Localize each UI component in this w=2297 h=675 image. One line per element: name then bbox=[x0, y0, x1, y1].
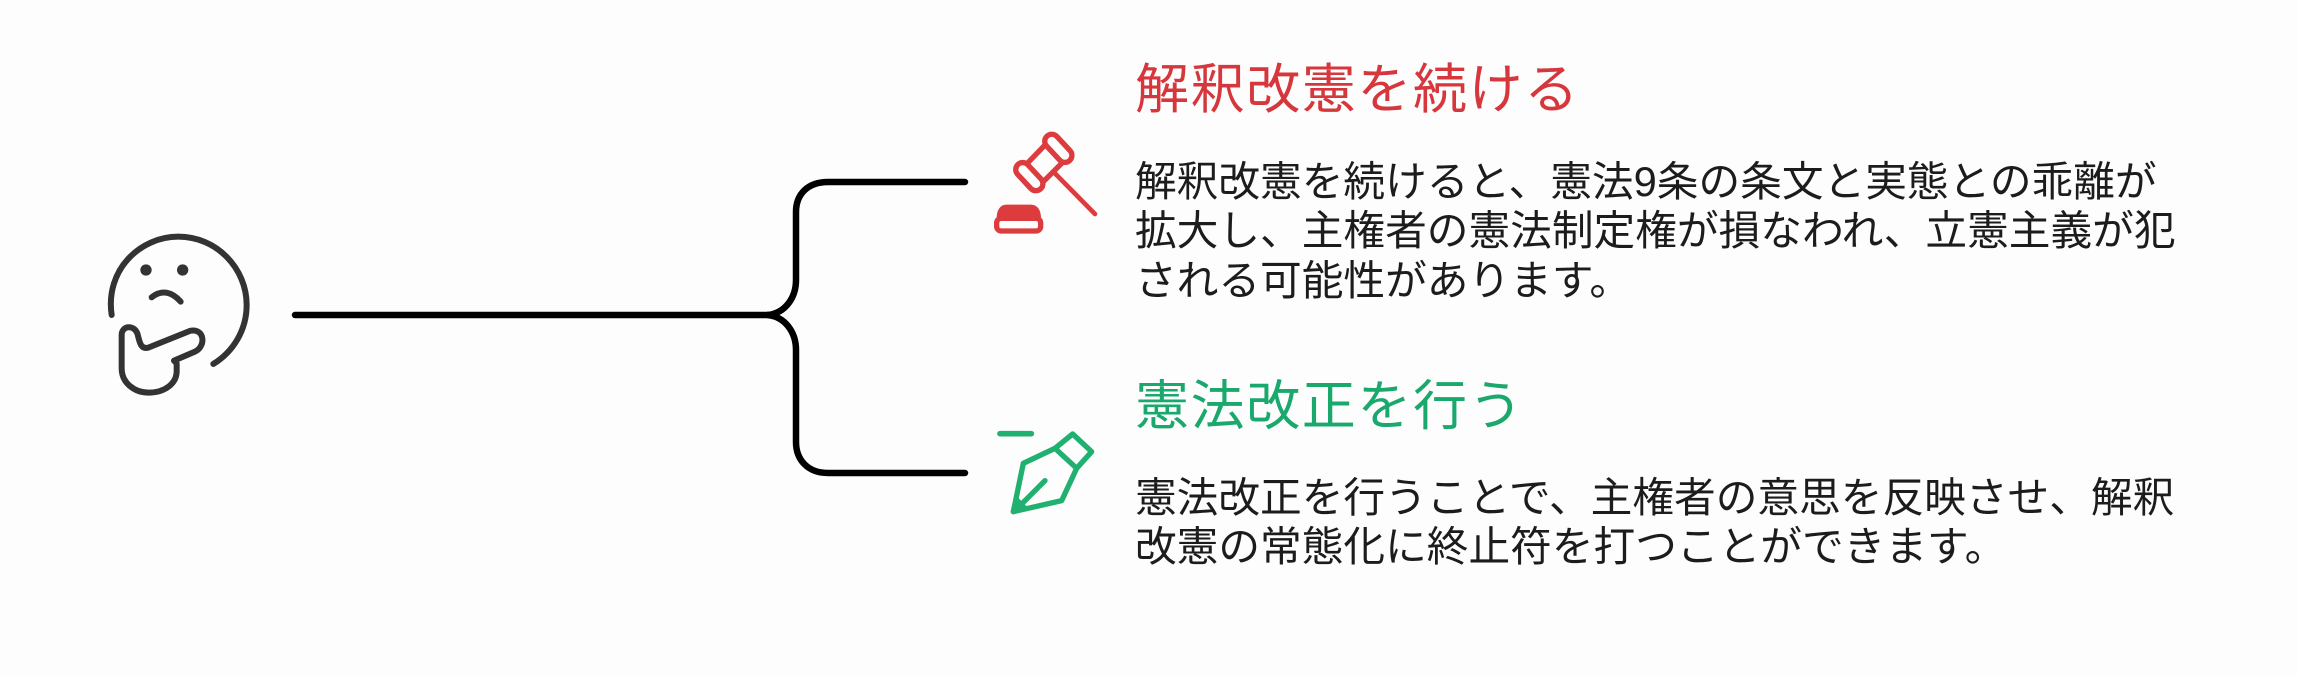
body text: amendment benefits: 憲法改正を行うことで、主権者の意思を反映させ、解釈 bbox=[1135, 474, 2174, 521]
panel: amend the constitution bbox=[1135, 376, 2174, 570]
body text: reinterpretation risks: 拡大し、主権者の憲法制定権が損なわれ、立憲主義が犯 bbox=[1135, 207, 2176, 254]
icon: red gavel bbox=[997, 131, 1095, 231]
panel: continue reinterpretation bbox=[1135, 60, 2176, 304]
connector: bracket from face to two options bbox=[295, 182, 965, 473]
body text: amendment benefits bbox=[1135, 474, 2174, 570]
body text: reinterpretation risks bbox=[1135, 158, 2176, 304]
body text: reinterpretation risks: 解釈改憲を続けると、憲法9条の条文と実態との乖離が bbox=[1135, 158, 2157, 205]
icon: thinking face bbox=[111, 237, 247, 393]
heading: green: 憲法改正を行う bbox=[1135, 376, 1524, 436]
heading: red: 解釈改憲を続ける bbox=[1135, 60, 1580, 120]
body text: reinterpretation risks: される可能性があります。 bbox=[1135, 257, 1631, 304]
body text: amendment benefits: 改憲の常態化に終止符を打つことができます。 bbox=[1135, 523, 2006, 570]
icon: green fountain pen nib bbox=[1000, 434, 1092, 512]
